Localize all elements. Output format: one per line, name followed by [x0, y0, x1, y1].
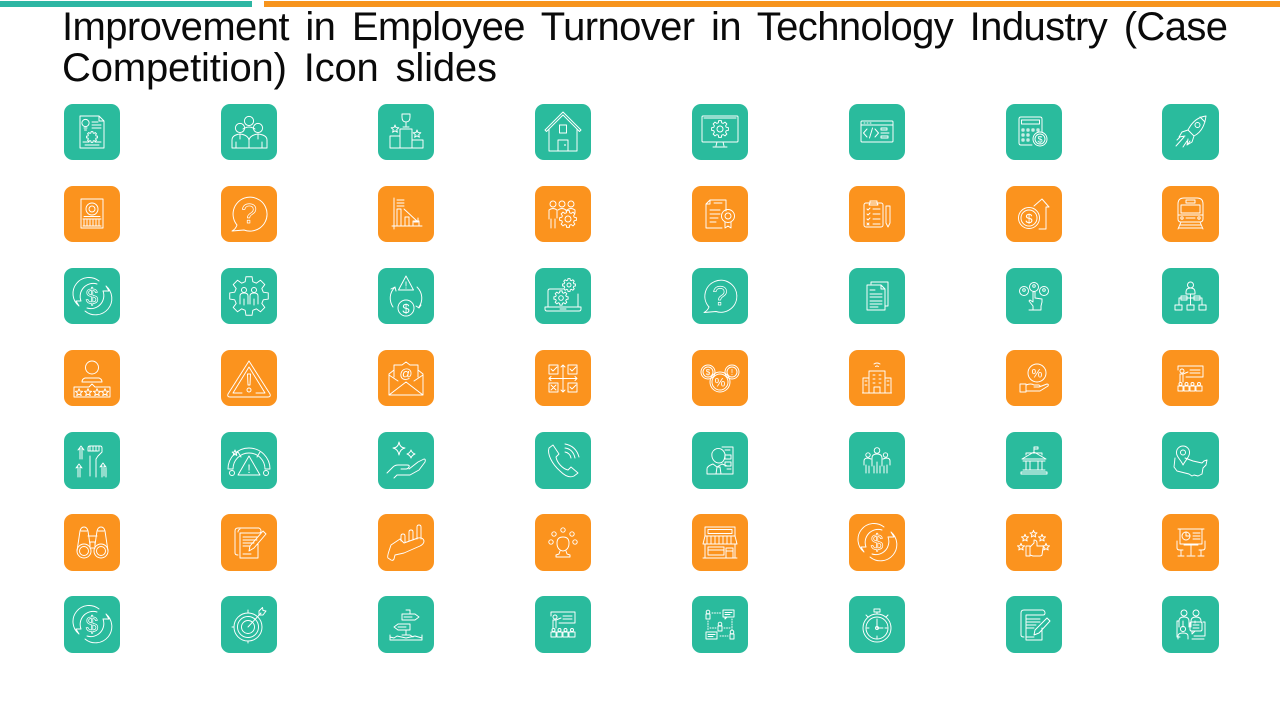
tile: laptop gears [535, 268, 591, 324]
icon: open email: @ [399, 366, 413, 381]
icon: monitor gear [702, 116, 738, 147]
top accent bar: orange [264, 1, 1280, 7]
tile: monitor gear [692, 104, 748, 160]
icon: idea document [80, 116, 104, 148]
tile: team [221, 104, 277, 160]
icon: group of people [864, 448, 890, 473]
icon: rated person [74, 361, 110, 397]
icon: raised fist arrows [76, 446, 106, 477]
icon: house [545, 112, 581, 151]
tile: warning [221, 350, 277, 406]
icon: warning dollar cycle: ! [405, 280, 407, 292]
icon: dollar cycle: $ [86, 284, 98, 309]
icon: hand with bars [388, 525, 424, 560]
tile: question mark [692, 268, 748, 324]
icon: warning dollar cycle [390, 276, 422, 316]
icon: coins percent: % [715, 376, 726, 390]
tile: people chat [1162, 596, 1219, 653]
tile: bank [1006, 432, 1062, 489]
icon: risk gauge: ! [247, 462, 251, 476]
tile: thumbs up stars [1006, 514, 1062, 571]
icon: notes and pen [235, 528, 266, 558]
title: Competition) Icon slides [62, 46, 497, 90]
icon: thumbs up stars [1017, 530, 1050, 556]
icon: declining chart [392, 198, 422, 229]
icon: presentation table [1177, 529, 1205, 556]
icon: notes and pen [1021, 610, 1050, 640]
tile: man document [692, 432, 748, 489]
tile: rated person [64, 350, 120, 406]
icon: man document [707, 447, 733, 474]
icon: bank building [1021, 447, 1047, 474]
icon: calculator dollar: $ [1037, 134, 1043, 144]
tile: head ideas [535, 514, 591, 571]
tile: presenter [1162, 350, 1219, 406]
icon: warning dollar cycle: $ [402, 301, 410, 316]
title [62, 5, 1228, 90]
tile: store [692, 514, 748, 571]
tile: clipboard [849, 186, 905, 242]
icon: smart building [862, 363, 892, 393]
tile: rocket [1162, 104, 1219, 160]
icon: organisation chart [1175, 282, 1206, 310]
icon: dollar cycle: $ [86, 612, 98, 637]
icon: question bubble: ? [712, 281, 728, 311]
tile: target [221, 596, 277, 653]
tile: hand selecting people [1006, 268, 1062, 324]
icon: clipboard pencil [864, 201, 890, 227]
tile: podium [378, 104, 434, 160]
tile: train [1162, 186, 1219, 242]
icon: question bubble: ? [241, 198, 257, 229]
icon: gear people [230, 277, 268, 315]
tile: notes and pen [1006, 596, 1062, 653]
icon: team [232, 116, 267, 148]
tile: dollar cycle [64, 596, 120, 653]
icon: store [703, 527, 737, 558]
icon: code window [861, 121, 893, 142]
tile: code window [849, 104, 905, 160]
tile: decision matrix [535, 350, 591, 406]
icon: warning triangle [228, 361, 270, 397]
tile: warning dollar cycle [378, 268, 434, 324]
tile: phone [535, 432, 591, 489]
icon: train [1178, 198, 1203, 229]
icon: laptop gears [545, 279, 581, 311]
tile: communication network [692, 596, 748, 653]
tile: group [849, 432, 905, 489]
tile: raised fists [64, 432, 120, 489]
icon: podium trophy [390, 114, 423, 148]
tile: idea document [64, 104, 120, 160]
tile: calculator [1006, 104, 1062, 160]
tile: presenter [535, 596, 591, 653]
icon: people gear [549, 201, 576, 228]
tile: binoculars [64, 514, 120, 571]
icon: stopwatch [863, 609, 891, 642]
icon: decision matrix [549, 365, 577, 392]
icon: phone [549, 444, 579, 477]
icon: hand sparkles [387, 442, 425, 478]
icon: binoculars [77, 527, 108, 558]
tile: report [64, 186, 120, 242]
tile: dollar cycle [64, 268, 120, 324]
tile: coins percent [692, 350, 748, 406]
icon: documents [867, 282, 888, 310]
icon: hand selecting people [1020, 282, 1048, 310]
tile: documents [849, 268, 905, 324]
tile: coin growth [1006, 186, 1062, 242]
icon: rocket [1176, 116, 1206, 147]
icon: communication network [706, 610, 734, 639]
tile: presentation table [1162, 514, 1219, 571]
tile: question bubble [221, 186, 277, 242]
tile: hand sparkles [378, 432, 434, 489]
tile: signpost [378, 596, 434, 653]
icon: report chart [81, 199, 103, 228]
icon: people chat [1177, 610, 1205, 639]
icon: map pin [1174, 446, 1207, 476]
tile: notes and pen [221, 514, 277, 571]
tile: gear people [221, 268, 277, 324]
icon: coin growth arrow: $ [1025, 211, 1033, 226]
icon: presenter board [551, 612, 575, 637]
tile: map pin [1162, 432, 1219, 489]
title: Improvement in Employee Turnover in Technology Industry (Case [62, 5, 1228, 49]
tile: risk gauge [221, 432, 277, 489]
tile: percent hand [1006, 350, 1062, 406]
icon: signpost [390, 610, 422, 640]
top accent bar: teal [0, 1, 252, 7]
icon: coins percent: $ [706, 368, 711, 377]
icon: coins percent [701, 365, 739, 392]
icon: coins percent: ! [731, 368, 733, 377]
tile: stopwatch [849, 596, 905, 653]
tile: declining chart [378, 186, 434, 242]
tile: certificate [692, 186, 748, 242]
icon: certificate [706, 200, 734, 228]
tile: hand with bars [378, 514, 434, 571]
tile: people gear [535, 186, 591, 242]
tile: smart building [849, 350, 905, 406]
icon: head ideas [549, 528, 577, 557]
tile: house [535, 104, 591, 160]
tile: email [378, 350, 434, 406]
icon: target arrow [232, 608, 266, 643]
icon: presenter board [1178, 366, 1203, 391]
tile: dollar cycle [849, 514, 905, 571]
icon: percent hand: % [1032, 366, 1043, 380]
tile: organisation chart [1162, 268, 1219, 324]
icon: dollar cycle: $ [871, 530, 883, 555]
